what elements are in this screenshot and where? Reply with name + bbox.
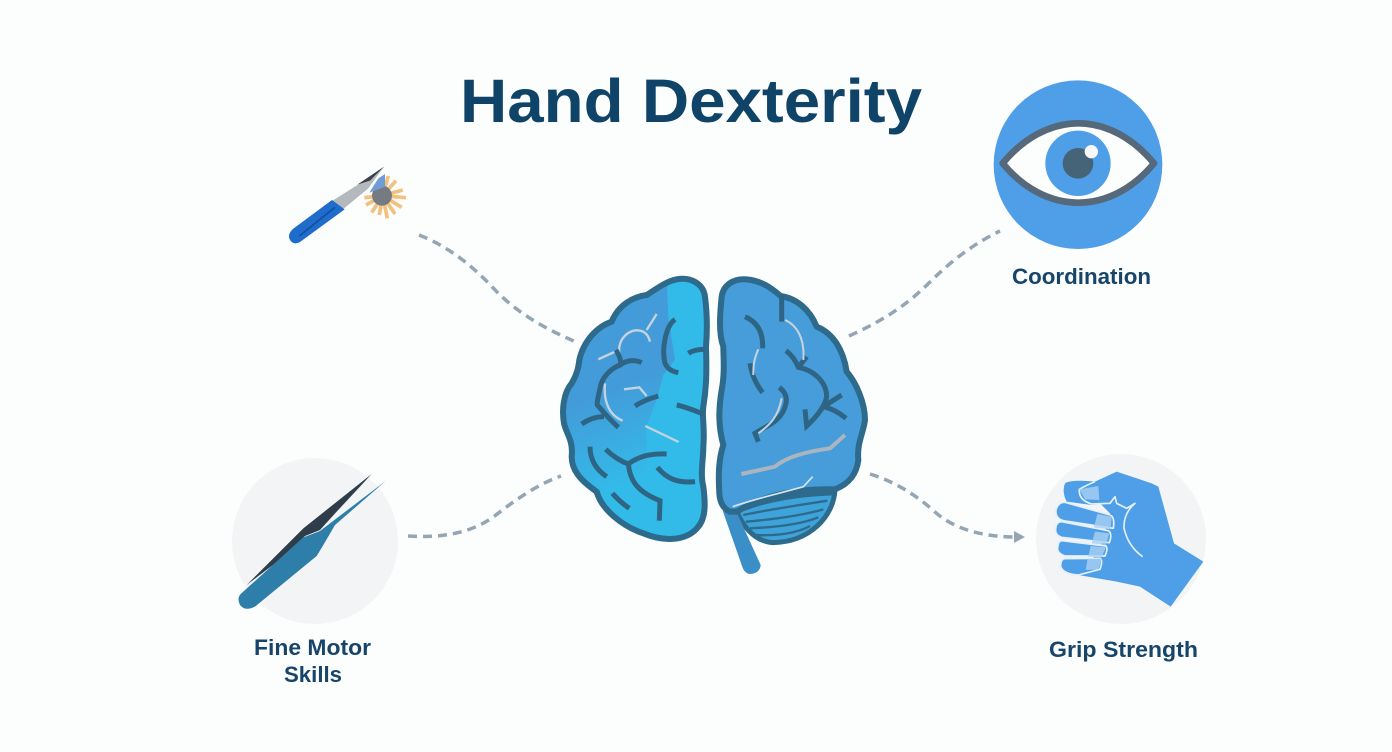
- right hemisphere highlights: [753, 320, 804, 433]
- arrow: brain to scalpel: [419, 235, 576, 342]
- icon: tweezers: [238, 474, 386, 609]
- left hemisphere darker lobe: [566, 286, 675, 476]
- right hemisphere folds: [745, 295, 846, 442]
- left hemisphere folds: [582, 319, 704, 521]
- hand crease lines: [1079, 482, 1143, 557]
- left hemisphere highlights: [598, 314, 679, 442]
- arrow: brain to grip strength: [870, 474, 1025, 543]
- arrow: brain to fine motor skills: [408, 476, 561, 536]
- label: fine motor skills: Fine Motor: [254, 635, 371, 660]
- icon: fist: [1056, 472, 1203, 607]
- spark: [364, 176, 406, 218]
- icon background circle: [232, 458, 398, 624]
- thumb: [1064, 481, 1117, 505]
- panel: coordination: [994, 80, 1162, 289]
- cerebellum: [737, 490, 835, 543]
- panel: grip strength: [1036, 454, 1206, 662]
- label: coordination: Coordination: [1012, 264, 1151, 289]
- label: fine motor skills: Skills: [284, 662, 342, 687]
- label: fine motor skills: [254, 635, 371, 687]
- panel: fine motor skills: [232, 458, 398, 687]
- arrow: brain to coordination: [849, 231, 1000, 336]
- left hemisphere: [553, 277, 707, 539]
- fingernails: [1079, 486, 1112, 570]
- label: grip strength: Grip Strength: [1049, 637, 1198, 662]
- brain stem: [723, 511, 761, 574]
- blade: [333, 167, 384, 208]
- palm and wrist: [1078, 472, 1203, 607]
- icon: eye: [994, 80, 1162, 249]
- icon: scalpel with spark: [289, 167, 406, 243]
- right hemisphere: [719, 279, 865, 512]
- left hemisphere outline: [563, 279, 707, 539]
- handle: [289, 200, 345, 243]
- fingers: [1056, 502, 1114, 575]
- icon: brain: [553, 277, 865, 574]
- title: Hand Dexterity: [460, 67, 922, 135]
- icon background circle: [1036, 454, 1206, 624]
